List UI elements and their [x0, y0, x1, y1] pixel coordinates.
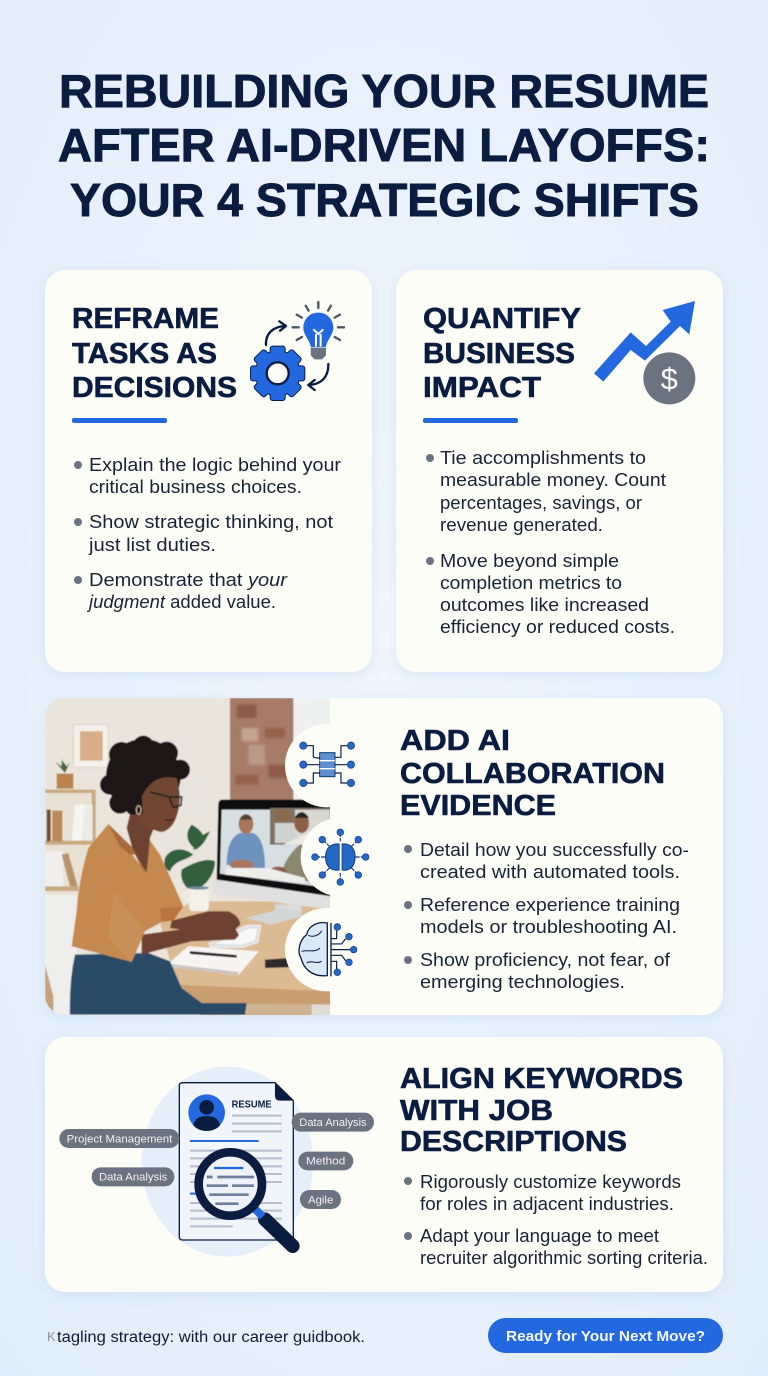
- heading: reframe tasks as decisions: REFRAME: [72, 303, 219, 335]
- icon: rising arrow and dollar coin: [594, 301, 697, 406]
- illustration: resume under magnifying glass with keyword tags: Data Analysis: [99, 1172, 168, 1184]
- far forearm: [170, 911, 240, 931]
- footer note: K: [47, 1329, 56, 1344]
- bullets: AI collaboration: models or troubleshooting AI.: [420, 916, 677, 937]
- panel: quantify business impact: [396, 270, 723, 672]
- heading: quantify business impact: IMPACT: [423, 372, 541, 404]
- bullets: quantify: Move beyond simple: [440, 550, 619, 571]
- photo: woman on a video call at her desk: [45, 698, 332, 1018]
- illustration: resume under magnifying glass with keyword tags: Agile: [308, 1194, 333, 1206]
- title: YOUR 4 STRATEGIC SHIFTS: [70, 174, 699, 226]
- bullets: keywords: recruiter algorithmic sorting criteria.: [420, 1247, 708, 1268]
- illustration: resume under magnifying glass with keyword tags: Method: [306, 1156, 345, 1168]
- heading: quantify business impact: BUSINESS: [423, 338, 575, 370]
- plant: [164, 825, 215, 891]
- panel: add AI collaboration evidence: [45, 698, 723, 1018]
- bullets: keywords: Adapt your language to meet: [420, 1225, 659, 1246]
- monitor: [274, 904, 302, 912]
- heading: reframe tasks as decisions: DECISIONS: [72, 372, 237, 404]
- bullets: reframe: Demonstrate that your: [89, 569, 288, 590]
- panel: align keywords with job descriptions: [45, 1037, 723, 1292]
- bullets: quantify: [426, 447, 675, 637]
- hair: [100, 736, 190, 815]
- bullets: AI collaboration: Detail how you successfully co-: [420, 839, 689, 860]
- desk: [200, 1014, 219, 1015]
- footer note: tagling strategy: with our career guidbook.: [57, 1329, 365, 1346]
- illustration: resume under magnifying glass with keyword tags: RESUME: [232, 1099, 272, 1110]
- bullets: quantify: revenue generated.: [440, 514, 603, 535]
- bullets: quantify: efficiency or reduced costs.: [440, 616, 675, 637]
- call to action button: [488, 1318, 723, 1353]
- icon: brain with circuits badge: [285, 908, 368, 991]
- title: [58, 65, 710, 226]
- bullets: quantify: measurable money. Count: [440, 469, 666, 490]
- neck and face: [126, 812, 154, 873]
- icon: rising arrow and dollar coin: $: [661, 362, 678, 396]
- bullets: keywords: for roles in adjacent industries.: [420, 1193, 674, 1214]
- heading: align keywords: WITH JOB: [400, 1095, 553, 1127]
- title: REBUILDING YOUR RESUME: [59, 65, 709, 117]
- icon: server network badge: [285, 724, 368, 807]
- panel: reframe tasks as decisions: [45, 270, 372, 672]
- heading: add AI collaboration evidence: ADD AI: [400, 725, 510, 757]
- title: AFTER AI-DRIVEN LAYOFFS:: [58, 119, 710, 171]
- bullets: AI collaboration: Show proficiency, not fear, of: [420, 949, 671, 970]
- bullets: AI collaboration: [404, 839, 689, 992]
- bullets: AI collaboration: Reference experience training: [420, 894, 680, 915]
- bullets: quantify: completion metrics to: [440, 572, 622, 593]
- keyboard: [208, 925, 262, 948]
- jeans: [70, 953, 247, 1015]
- bullets: quantify: outcomes like increased: [440, 594, 649, 615]
- heading: reframe tasks as decisions: [72, 303, 237, 423]
- bullets: quantify: percentages, savings, or: [440, 492, 642, 513]
- illustration: resume under magnifying glass with keyword tags: [59, 1067, 374, 1257]
- call to action button: Ready for Your Next Move?: [506, 1328, 705, 1345]
- notebook: [165, 946, 259, 975]
- bullets: reframe: Explain the logic behind your: [89, 454, 341, 475]
- illustration: resume under magnifying glass with keyword tags: Data Analysis: [299, 1117, 367, 1129]
- heading: quantify business impact: [423, 303, 581, 423]
- heading: align keywords: DESCRIPTIONS: [400, 1126, 627, 1158]
- heading: quantify business impact: QUANTIFY: [423, 303, 581, 335]
- bullets: reframe: judgment added value.: [86, 591, 276, 612]
- bullets: AI collaboration: emerging technologies.: [420, 971, 625, 992]
- near forearm: [142, 928, 239, 955]
- illustration: resume under magnifying glass with keyword tags: Project Management: [67, 1133, 172, 1145]
- bullets: quantify: Tie accomplishments to: [440, 447, 646, 468]
- icon: gear and lightbulb cycle: [251, 302, 344, 400]
- icon: digital brain badge: [301, 818, 379, 896]
- heading: align keywords: [400, 1063, 683, 1158]
- phone: [265, 958, 290, 968]
- bullets: keywords: [404, 1171, 708, 1268]
- heading: add AI collaboration evidence: EVIDENCE: [400, 790, 556, 822]
- bullets: reframe: just list duties.: [88, 534, 216, 555]
- shirt: [72, 824, 183, 962]
- bullets: AI collaboration: created with automated tools.: [420, 861, 680, 882]
- heading: add AI collaboration evidence: [400, 725, 665, 822]
- heading: reframe tasks as decisions: TASKS AS: [72, 338, 217, 370]
- bullets: keywords: Rigorously customize keywords: [420, 1171, 681, 1192]
- cup: [188, 887, 209, 911]
- heading: align keywords: ALIGN KEYWORDS: [400, 1063, 683, 1095]
- bullets: reframe: [74, 454, 341, 612]
- heading: add AI collaboration evidence: COLLABORATION: [400, 758, 665, 790]
- bullets: reframe: Show strategic thinking, not: [89, 511, 333, 532]
- bullets: reframe: critical business choices.: [89, 476, 302, 497]
